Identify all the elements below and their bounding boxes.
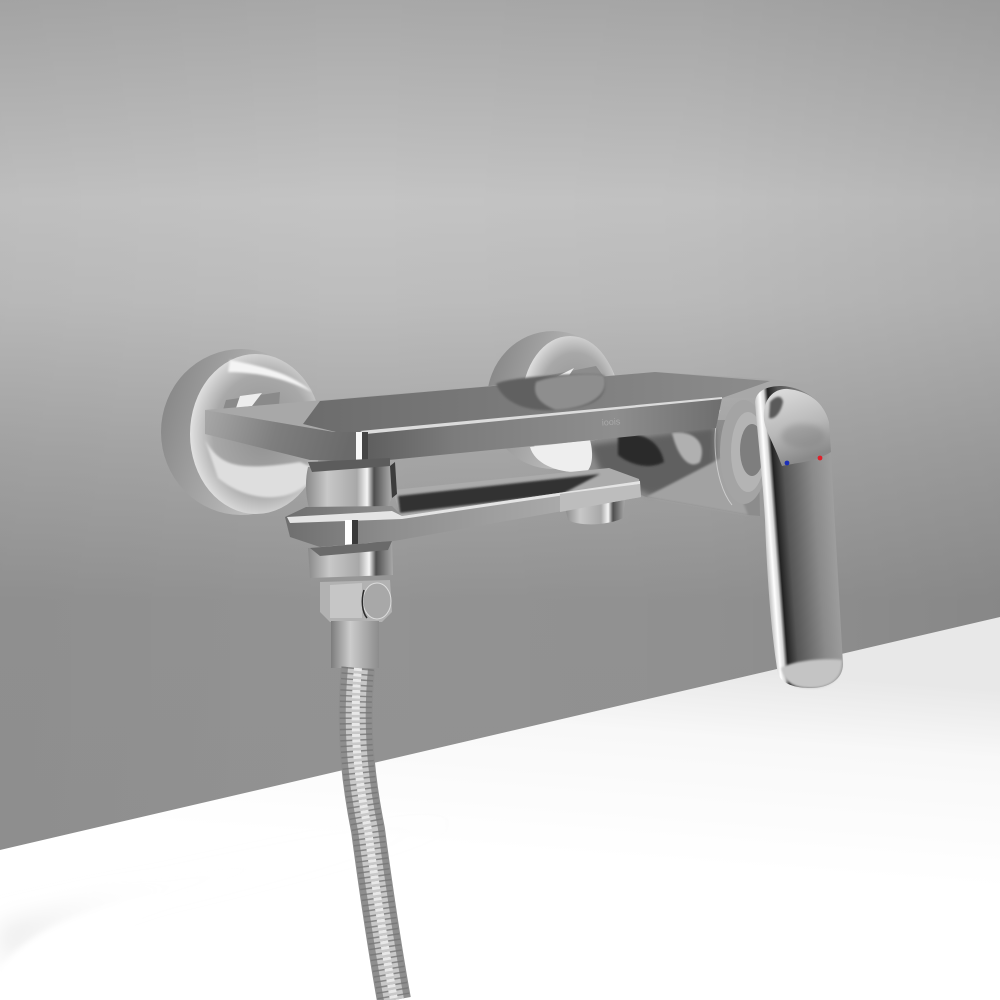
bar top surface (205, 372, 816, 433)
brand mark: ioois (601, 416, 621, 428)
mixer top bar (205, 372, 816, 462)
handle bottom reflection (781, 659, 842, 688)
valve ring behind handle (715, 400, 768, 505)
lower collar (308, 541, 393, 578)
bar front face (366, 398, 722, 462)
right wall body behind handle (530, 420, 760, 516)
bar left face (205, 410, 358, 462)
hose connector (331, 621, 379, 668)
diverter nut (320, 580, 392, 622)
flexible hose (356, 668, 394, 1000)
left wall escutcheon (161, 349, 322, 515)
hot and cold dots (785, 456, 822, 465)
lower spout assembly (285, 458, 641, 548)
bar front top highlight (360, 397, 722, 434)
aerator (565, 498, 625, 524)
bar corner highlight (356, 432, 368, 462)
spout body (285, 481, 641, 548)
centre wall escutcheon (487, 331, 619, 469)
handle top cap (764, 389, 831, 466)
upper collar (306, 462, 391, 512)
spout upper channel (393, 468, 640, 516)
bathtub (0, 617, 1000, 1000)
centre escutcheon reflection (496, 374, 605, 410)
lever handle (755, 386, 843, 688)
